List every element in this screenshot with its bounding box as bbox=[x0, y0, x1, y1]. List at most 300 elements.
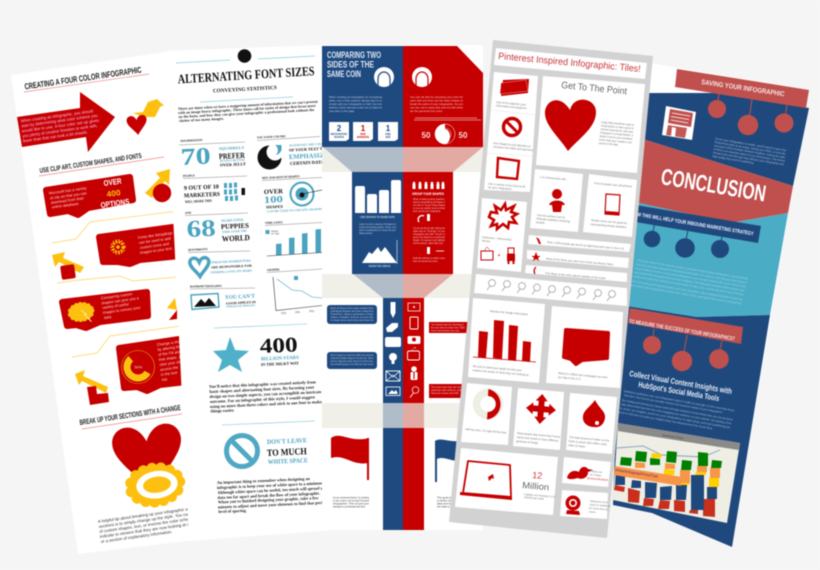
title: comparing two sides: COMPARING TWO bbox=[327, 50, 381, 60]
tile: laptop twelve million: airports per week bbox=[524, 495, 545, 501]
icon: three red circles bbox=[708, 94, 794, 135]
icon: no sign bbox=[504, 118, 520, 136]
tile: speech bubble bbox=[546, 306, 623, 388]
callout: wingdings fonts: images to your text. bbox=[140, 246, 173, 255]
icon: blue no sign bbox=[226, 436, 258, 466]
column: lower center bbox=[383, 428, 424, 530]
text: social tools paragraph bbox=[619, 389, 735, 431]
callout: blue box two: you should group it so that you can move bbox=[330, 363, 374, 366]
icon: arrow and square bbox=[52, 252, 84, 280]
header: blue side: simply split your infographic in half. Use two bbox=[329, 102, 382, 106]
stat: 9 out of 10: MARKETERS bbox=[184, 192, 221, 199]
funnel: second bbox=[353, 274, 453, 298]
tile: get to the point: Large titles should be used to bbox=[601, 120, 635, 127]
text: saving instructions bbox=[712, 137, 787, 166]
icon: picture bbox=[386, 387, 400, 396]
icon: yellow cloud with lightning bbox=[68, 302, 94, 324]
icon: big red heart bbox=[545, 100, 596, 151]
stat: 400 billion stars: 400 bbox=[259, 332, 298, 358]
header: red side: can see, we're using blue and red with white bbox=[410, 106, 463, 110]
text: blue flag caption bbox=[437, 496, 463, 508]
tile: cell phones bbox=[583, 174, 637, 237]
icon: square outline bbox=[497, 158, 519, 179]
stat: colors moon icon bbox=[257, 134, 329, 170]
text: saving instructions: in PNG is an important aspect of your final product. This format bbox=[713, 147, 785, 163]
stat: sentiments heart: SENTIMENTS bbox=[188, 247, 208, 252]
stat cards bbox=[329, 122, 398, 141]
paragraph: shapes and fonts: You'll notice that this infographic was created entirely from bbox=[209, 379, 316, 389]
section: red grouped shapes: infographic and click "Group" to bbox=[413, 232, 445, 236]
callout: clip art options: of clip art that you can bbox=[50, 191, 87, 200]
callout: blue box two: you've objected each element of the icon, bbox=[330, 360, 374, 363]
text: saving instructions: format is the best file type that will give your infographics the bbox=[713, 151, 785, 166]
icon: tag bbox=[386, 323, 398, 332]
icon: tv bbox=[408, 347, 420, 360]
callout: blue box two bbox=[327, 352, 377, 369]
paragraph: white space: An important thing to remember when designing an bbox=[217, 476, 311, 485]
stat: 9 out of 10: 9 OUT OF 10 bbox=[184, 184, 219, 192]
paragraph: shapes and fonts: using no more than three colors and stick to one font to make bbox=[210, 399, 322, 409]
callout: clip art options bbox=[46, 177, 133, 215]
tile: webcam: years. bbox=[589, 510, 597, 514]
tile: bar chart: Be sure to label your graph so that your bbox=[473, 364, 522, 372]
stat: 400 billion stars bbox=[259, 332, 299, 367]
paragraph: white space: Although white space can be useful, too much will spread your bbox=[217, 485, 329, 495]
icon: phone and person bbox=[418, 214, 430, 222]
tile: three stacked icons: up your infographic. bbox=[488, 185, 513, 191]
text: red flag caption: designs a professional feel bbox=[333, 504, 365, 508]
text: blue flag caption: to better show you bbox=[437, 498, 460, 502]
stat cards: SIZE bbox=[385, 136, 391, 139]
paragraph: intro: There are times when we have a staggering amount of information that we can't present bbox=[178, 100, 319, 111]
panel: alternating font sizes bbox=[165, 45, 335, 541]
heading: collect visual content insights: HubSpot's Social Media Tools bbox=[638, 380, 720, 403]
section: red grouped shapes: When creating custom graphics, bbox=[413, 197, 445, 201]
tile: bar chart bbox=[468, 298, 545, 383]
stat: random thoughts: GOOD APPLES IN bbox=[226, 300, 257, 305]
callout: clip art options: OVER bbox=[103, 177, 122, 188]
title: comparing two sides: SIDES OF THE bbox=[327, 60, 374, 70]
callout: red box two: hold your mouse and shift bbox=[431, 392, 459, 395]
stat cards: 1 bbox=[361, 124, 366, 133]
tile: follow on twitter bbox=[562, 457, 611, 487]
header: red side: You can do this by choosing one color for bbox=[410, 95, 463, 99]
tile: half donut bbox=[461, 383, 512, 445]
tile: three stacked icons bbox=[484, 72, 538, 192]
paragraph: white space: level of spacing. bbox=[218, 508, 247, 514]
callout: blue box one: shapes, rectangles, and lines, we were able bbox=[330, 316, 374, 319]
tile: 1 in 3 americans: illustrate statistics involving bbox=[536, 217, 571, 223]
header: blue side: distinct colors and give each set of data it's bbox=[329, 106, 383, 110]
text: blue flag caption: data and ideas side bbox=[437, 502, 462, 506]
paragraph: shapes and fonts: outcome. For an infographic of this style, I would suggest bbox=[210, 394, 316, 404]
chart: stacked bars bbox=[613, 423, 740, 523]
header: red side bbox=[403, 46, 483, 147]
subtitle: conveying statistics: CONVEYING STATISTICS bbox=[213, 85, 277, 94]
tile: explosions: Movies bbox=[482, 239, 491, 243]
stat: 70 squirrels: SQUIRRELS bbox=[219, 145, 245, 151]
icon: laptop bbox=[460, 461, 512, 500]
icon: bulb bbox=[389, 353, 397, 364]
header: red side: each side and then use the basic shapes to bbox=[410, 98, 463, 102]
text: teal paragraphs: how you use large amounts of educational information for readers. Now that you have learned bbox=[636, 262, 747, 285]
stat: sentiments heart: INBOUND MARKETERS bbox=[211, 259, 251, 264]
callout: custom shapes: shapes can give you a bbox=[101, 296, 140, 305]
bar chart: time lines: TIME LINES bbox=[265, 220, 283, 225]
icon: donut 50 percent: 50% bbox=[134, 366, 143, 370]
text: saving instructions: Once your infographic is made, you'll need to save the bbox=[715, 137, 787, 152]
donut: 50 50: 50 bbox=[459, 131, 468, 140]
section: red grouped shapes bbox=[403, 172, 453, 274]
paragraph: break up sections tip: indicate to viewers that they are now looking at a bbox=[99, 521, 190, 539]
stat: 68 years: YEARS UNTIL bbox=[221, 218, 245, 223]
heading: use clip art: USE CLIP ART, CUSTOM SHAPES, AND FONTS bbox=[39, 153, 142, 175]
paragraph: break up sections tip bbox=[97, 506, 195, 544]
text: red flag caption: As we mentioned before, by sticking bbox=[333, 496, 369, 500]
icon: tv plus robot: + bbox=[498, 253, 500, 259]
callout: clip art options: online database. bbox=[52, 202, 80, 209]
stat: over 100 shapes: OVER bbox=[264, 188, 283, 196]
title: comparing two sides: SAME COIN bbox=[327, 69, 361, 79]
stat: 400 billion stars: IN THE MILKY WAY bbox=[261, 360, 299, 367]
section: red grouped shapes: than one element at a time. bbox=[413, 259, 438, 263]
section: red grouped shapes: You can do this by right clicking the bbox=[413, 226, 445, 230]
section: blue charts: data points. bbox=[359, 231, 373, 235]
callout: donut chart tip: Change a shape bbox=[157, 339, 185, 347]
callout: wingdings fonts bbox=[99, 226, 180, 264]
section: red grouped shapes: Hold the shift key to select more bbox=[413, 256, 445, 260]
callout: red box two: particular color scheme, and bbox=[431, 389, 462, 392]
bar chart: time lines: SERIES bbox=[271, 231, 279, 233]
callout: donut chart tip: of the Fill and bbox=[158, 350, 181, 357]
tile: laptop twelve million: 12 bbox=[532, 470, 543, 481]
icon: three blue circles bbox=[644, 222, 729, 258]
tile: three stacked icons: Use art to organize your bbox=[496, 100, 526, 107]
callout: donut chart tip: access the bbox=[160, 366, 179, 372]
stat cards: FINE bbox=[385, 133, 391, 136]
section: blue charts: create interesting graphs, charts, and bbox=[359, 225, 396, 229]
tile: cell phones: representing simple statistics bbox=[590, 222, 627, 229]
column: red icons bbox=[403, 298, 424, 403]
stat: white space: DON'T LEAVE bbox=[267, 437, 307, 446]
tile: half donut: Half the time, I'm right all the time bbox=[465, 427, 507, 435]
stat: 68 years bbox=[185, 211, 250, 243]
tile: webcam bbox=[560, 490, 611, 519]
paragraph: break up sections tip: of custom shapes, text, or inverse the color scheme bbox=[99, 516, 195, 534]
stat: 68 years: PUPPIES bbox=[221, 222, 249, 231]
callout: custom shapes: Comparing custom bbox=[101, 292, 133, 300]
icon: big heart with yellow cloud bbox=[111, 422, 186, 506]
callout: clip art options: download from their bbox=[51, 196, 85, 205]
text: saving instructions: PowerPoint slide as an image. Saving as a PNG, or from the bbox=[714, 140, 786, 156]
paragraph: break up sections tip: A helpful tip about breaking up your infographic and bbox=[97, 506, 193, 524]
icon: video bbox=[408, 303, 420, 311]
stat: over 100 shapes: MIX AND MATCH SHAPES bbox=[262, 174, 300, 180]
paragraph: white space: minutes to adjust and move your elements to find that perfect bbox=[218, 500, 328, 509]
text: teal paragraphs: what it takes to have a successful infographic, you can get started with a set of free tools bbox=[635, 266, 747, 289]
text: teal paragraphs bbox=[631, 258, 748, 306]
banner: measure success: TO MEASURE THE SUCCESS OF YOUR INFOGRAPHICS? bbox=[629, 319, 735, 343]
text: social tools paragraph: post on Click here to create your insights today! See Measurement Free Social Tools. bbox=[619, 410, 713, 431]
tile: three stacked icons: Use images to pull attention or bbox=[493, 141, 531, 148]
icon: yellow wheel bbox=[111, 240, 125, 254]
header: blue side bbox=[322, 46, 403, 147]
panel: comparing two sides bbox=[322, 45, 483, 530]
icon: keyboard bbox=[385, 337, 401, 347]
icon: pencil bbox=[390, 302, 396, 318]
line chart: graphs: 2010 bbox=[281, 312, 287, 315]
chart: stacked bars: Awesome Chart bbox=[662, 433, 684, 440]
tile: follow on twitter: @inboundhubspot bbox=[587, 476, 609, 482]
icon: red bird bbox=[567, 467, 593, 479]
tile: cell phones: A lot of people use cell phones bbox=[594, 181, 633, 188]
callout: wingdings fonts: custom icons and bbox=[140, 242, 169, 250]
tile: speech bubble: About 6.1 billion text messages are sent bbox=[558, 371, 608, 379]
icon: red webcam bbox=[566, 496, 580, 515]
callout: red box two bbox=[429, 384, 474, 398]
icon: person red side bbox=[412, 67, 432, 87]
callout: wingdings fonts: Fonts like Wingdings bbox=[138, 231, 173, 240]
callout: custom shapes: data. bbox=[104, 315, 113, 320]
panel: saving and conclusion bbox=[613, 60, 809, 547]
section: blue charts: USE GRAPHS TO SHOW DATA bbox=[360, 216, 395, 219]
band: dark blue top bbox=[630, 93, 809, 186]
callout: blue box one: PowerPoint. Using a combination of basic bbox=[330, 313, 374, 316]
icon: black circle bbox=[238, 49, 251, 63]
paragraph: intro: on the fonts, and how they can give your infographic a professional look without the bbox=[178, 108, 315, 119]
stat cards: RAW bbox=[360, 133, 367, 136]
text: red flag caption: to two colors, we've kept focused bbox=[333, 498, 369, 502]
icon: tablet bbox=[410, 317, 418, 329]
tile: speech bubble: per day in the U.S. bbox=[558, 375, 582, 381]
band: red conclusion bbox=[630, 135, 793, 223]
callout: red box two: The icons seen here are not a bbox=[431, 386, 463, 389]
stat: 68 years: TAKE OVER THE bbox=[222, 229, 247, 234]
arrow callout: you plenty of creative freedom to work with, bbox=[22, 123, 98, 138]
stat: white space: WHITE SPACE bbox=[268, 457, 308, 466]
tile: get to the point: Get To The Point bbox=[561, 80, 628, 97]
tile: webcam: been in existence bbox=[590, 503, 611, 508]
callout: red box one: You should start by choosing a bbox=[431, 324, 464, 326]
callout: red box one: icons and choose one icon bbox=[431, 330, 460, 332]
header: red side: break the parts of your infographic. As you bbox=[410, 102, 463, 106]
banner: saving your infographic: SAVING YOUR INFOGRAPHIC bbox=[701, 79, 785, 98]
tile row: bite stat: Over 1,000 people get struck by lightning each year in the U.S. bbox=[547, 240, 625, 251]
line chart: graphs: GRAPHS bbox=[267, 267, 280, 272]
arrow callout: would like to use. A four color set up gives bbox=[21, 118, 99, 133]
section: red grouped shapes: one then to "Group" these shapes bbox=[413, 203, 446, 207]
callout: blue box one: Each of these icons was created from bbox=[330, 307, 374, 310]
stat: 70 squirrels: 70 bbox=[180, 144, 211, 171]
stat: 70 squirrels: PEANUT BUTTER bbox=[220, 158, 246, 163]
icon: starburst bbox=[489, 204, 517, 229]
icon: red phone bbox=[605, 194, 620, 215]
callout: wingdings fonts: can be used to add bbox=[139, 237, 171, 245]
tile: 1 in 3 americans bbox=[530, 169, 583, 232]
tile: 1 in 3 americans: Use the perfect icon to bbox=[537, 213, 566, 219]
banner: saving your infographic bbox=[675, 69, 809, 108]
callout: clip art options: 400 bbox=[106, 188, 122, 199]
tile: water drop: miles of water. bbox=[568, 443, 586, 449]
tile: cross arrows: gestures of things bbox=[516, 439, 539, 445]
icon: row of people bbox=[412, 182, 444, 189]
line chart: graphs: 2012 bbox=[309, 310, 315, 313]
tile: webcam: for more than 20 bbox=[589, 506, 609, 511]
arrow callout: fewer than that can look a bit chaotic. bbox=[22, 129, 88, 143]
section: red grouped shapes: shapes. To ungroup it just highlight bbox=[413, 238, 445, 242]
tile: cross arrows: wants and needs to have different bbox=[516, 435, 559, 443]
text: social tools paragraph: data about what has been the most engaging your audience on your website. By tracking a free bbox=[621, 402, 732, 426]
tile: three stacked icons: compare two sides and opinions bbox=[493, 145, 534, 152]
title: alternating font sizes: ALTERNATING FONT SIZES bbox=[177, 63, 315, 86]
stat: over 100 shapes: CAN BE USED TO CREATE GRAPHS bbox=[267, 207, 322, 213]
text: saving instructions: and select PNG Portable Network Graphics. Saving the slide bbox=[714, 144, 786, 159]
stat: 68 years: ONE bbox=[185, 211, 192, 215]
tile: three stacked icons: information and graphics bbox=[496, 104, 527, 110]
callout: donut chart tip: top. bbox=[162, 377, 168, 382]
icon: red person bbox=[549, 189, 565, 212]
tile: 1 in 3 americans: people. bbox=[536, 220, 546, 225]
callout: blue box two: selected multiple shapes of icons text. Since bbox=[330, 357, 374, 360]
tile: webcam: Webcams have bbox=[590, 499, 609, 504]
callout: clip art options: OPTIONS bbox=[100, 197, 131, 210]
stat: white space bbox=[267, 437, 308, 466]
line chart: graphs: 2011 bbox=[295, 311, 301, 314]
arrow callout: When creating an infographic, you should bbox=[20, 108, 94, 123]
stat: random thoughts bbox=[190, 284, 257, 310]
paragraph: white space: When you're finished designing your graphic, take a few bbox=[218, 495, 319, 504]
stat: 70 squirrels: INFORMATION bbox=[180, 138, 203, 143]
band: dark blue bottom bbox=[613, 305, 770, 547]
stat: sentiments heart: FINDING LOVE ON MARS bbox=[211, 269, 252, 274]
section: red grouped shapes: slide and an "Arrange" of your bbox=[413, 229, 445, 233]
stat: white space: TO MUCH bbox=[267, 447, 308, 459]
heading: break up your sections: BREAK UP YOUR SECTIONS WITH A CHANGE bbox=[79, 403, 181, 427]
paragraph: intro: clutter of too many images. bbox=[179, 117, 224, 123]
banner: how this will help: HOW THIS WILL HELP YOUR INBOUND MARKETING STRATEGY bbox=[631, 211, 754, 237]
paragraph: shapes and fonts: design on two simple aspects, you can accomplish an intricate bbox=[209, 389, 322, 399]
donut: 50 50 bbox=[422, 124, 468, 144]
heading: conclusion: CONCLUSION bbox=[659, 163, 768, 206]
section: blue charts bbox=[352, 172, 403, 274]
arrow callout bbox=[17, 92, 115, 152]
stat: random thoughts: YOU CAN'T bbox=[225, 294, 255, 301]
stat: 400 billion stars: BILLION STARS bbox=[261, 356, 299, 362]
text: social tools paragraph: Marketers publishers who use infographics grow in traffic an average of 12% more than those bbox=[624, 389, 735, 413]
icon: blue flag bbox=[435, 438, 472, 482]
tile row: star stat bbox=[527, 250, 629, 268]
tile row: moon stat bbox=[525, 265, 627, 282]
icon: envelope bbox=[386, 371, 400, 381]
icon: person blue side bbox=[374, 67, 394, 87]
callout: blue box one: to create some commonly used icons for bbox=[330, 319, 374, 322]
section: blue charts: Learn to use a variety of shapes to bbox=[359, 222, 397, 226]
paragraph: break up sections tip: sections is to simply change up the style. You can bbox=[98, 511, 191, 529]
text: social tools paragraph: that don't. But how do you actually measure the business impact of your infographic? bbox=[624, 393, 723, 414]
stat: sentiments heart: ARE RESPONSIBLE FOR bbox=[211, 264, 253, 269]
text: social tools paragraph: to share our insights, you'll see your infographics in right away, and start publishing the bbox=[620, 406, 731, 430]
callout: custom shapes bbox=[62, 292, 148, 328]
paragraph: white space: data too far apart and break the flow of your infographic. bbox=[217, 491, 320, 500]
callout: blue box one: individual shapes and then edited by bbox=[330, 310, 374, 313]
tile: bar chart: Mention the Single Information bbox=[490, 309, 528, 316]
paragraph: intro bbox=[178, 100, 319, 123]
callout: donut chart tip bbox=[119, 338, 187, 391]
section: red grouped shapes: so you can quickly move to throw bbox=[413, 206, 445, 210]
title tile: Pinterest Inspired Infographic: Tiles! bbox=[498, 51, 641, 75]
text: blue flag caption: The goal of this type bbox=[437, 496, 463, 500]
paragraph: intro: with an image heavy infographic. These times call for styles of design that focus more bbox=[178, 104, 316, 115]
stat: 9 out of 10 bbox=[183, 173, 247, 204]
icon: partly hidden arrow bbox=[167, 298, 177, 320]
text: teal paragraphs: readers and grab their attention on social media to share your content with their circle of friends bbox=[633, 274, 745, 297]
icon: bird and heart bbox=[126, 99, 164, 136]
tile: follow on twitter: Follow me bbox=[590, 469, 603, 474]
stat: random thoughts: RANDOM THOUGHTS bbox=[190, 284, 222, 288]
icon: magnifier bbox=[410, 387, 419, 398]
tile: three stacked icons: Use a variety of the lines to fill bbox=[488, 182, 526, 189]
callout: donut chart tip: click your shape bbox=[159, 359, 187, 367]
stat: over 100 shapes: SHAPES bbox=[266, 204, 284, 209]
section: red grouped shapes: all the pieces, right click and bbox=[413, 241, 444, 245]
text: teal paragraphs: And we've got a set of great templates and some inspiration. Start creating! Remember to have fun bbox=[632, 279, 743, 302]
tile: get to the point bbox=[536, 76, 645, 173]
stat: sentiments heart bbox=[188, 247, 253, 277]
stat: 9 out of 10: WILL SHARE THIS bbox=[185, 199, 212, 204]
header: blue side: When creating an infographic for comparing bbox=[329, 95, 382, 99]
tile: water drop: The total amount of water on the bbox=[569, 435, 610, 443]
tile row: bite stat bbox=[528, 235, 631, 252]
tile: cross arrows: Most people also know that France bbox=[517, 431, 561, 439]
tile: cross arrows bbox=[513, 388, 564, 450]
stat: colors moon icon: USE YOUR COLORS bbox=[257, 134, 286, 139]
icon: stacked sheets bbox=[500, 79, 529, 96]
paragraph: shapes and fonts bbox=[209, 379, 322, 413]
icon: person with tie bbox=[410, 366, 418, 380]
stat cards: 2 bbox=[337, 124, 342, 133]
funnel: third bbox=[383, 403, 424, 428]
tile: laptop twelve million: Laptops are missing in U.S. bbox=[524, 492, 556, 499]
tile: get to the point: infographic in a broad fashion. It bbox=[600, 131, 633, 137]
text: teal paragraphs: Of visual content on the internet creates a demand for high quality infographics, and improving bbox=[637, 258, 748, 281]
heading: collect visual content insights: Collect Visual Content Insights with bbox=[629, 369, 733, 396]
callout: custom shapes: images to convey your bbox=[103, 306, 141, 315]
text: blue flag caption: the data a better bbox=[437, 504, 457, 508]
tile: laptop twelve million bbox=[455, 448, 558, 515]
tile: get to the point: emphasize a main point or bbox=[601, 124, 634, 130]
text: red flag caption: infographics. This not just your bbox=[333, 502, 369, 506]
tile: get to the point: doesn't hurt to use innovative bbox=[599, 134, 633, 141]
text: red flag caption bbox=[333, 496, 369, 508]
stat: 70 squirrels: OVER JELLY bbox=[220, 161, 246, 167]
arrow callout: start by determining what color scheme you bbox=[21, 113, 98, 128]
chart: mountain: SHOW THE AREAS bbox=[369, 265, 391, 268]
stat: 9 out of 10: PEOPLE bbox=[183, 173, 195, 178]
tile: explosions: Explosions = Michael Bay bbox=[482, 235, 512, 242]
stat: 70 squirrels: PREFER bbox=[219, 151, 245, 161]
stat: colors moon icon: ALTERNATE THE COLOR bbox=[289, 142, 327, 147]
callout: custom shapes: variety of useful bbox=[102, 302, 129, 310]
tile: get to the point: shared experience with your bbox=[600, 127, 634, 134]
label: orange hashtag banner: #StartInfographFreeTrial bbox=[615, 468, 658, 479]
panel: pinterest inspired tiles bbox=[449, 40, 653, 538]
heading: creating a four color infographic: CREATING A FOUR COLOR INFOGRAPHIC bbox=[24, 65, 142, 91]
banner: measure success bbox=[628, 308, 743, 344]
icon: arrow and L shape bbox=[75, 370, 109, 405]
bar chart: white bars bbox=[355, 180, 401, 213]
tile: cell phones: Simple icons can be great for bbox=[591, 218, 627, 225]
callout: donut chart tip: by altering the bbox=[157, 345, 181, 352]
